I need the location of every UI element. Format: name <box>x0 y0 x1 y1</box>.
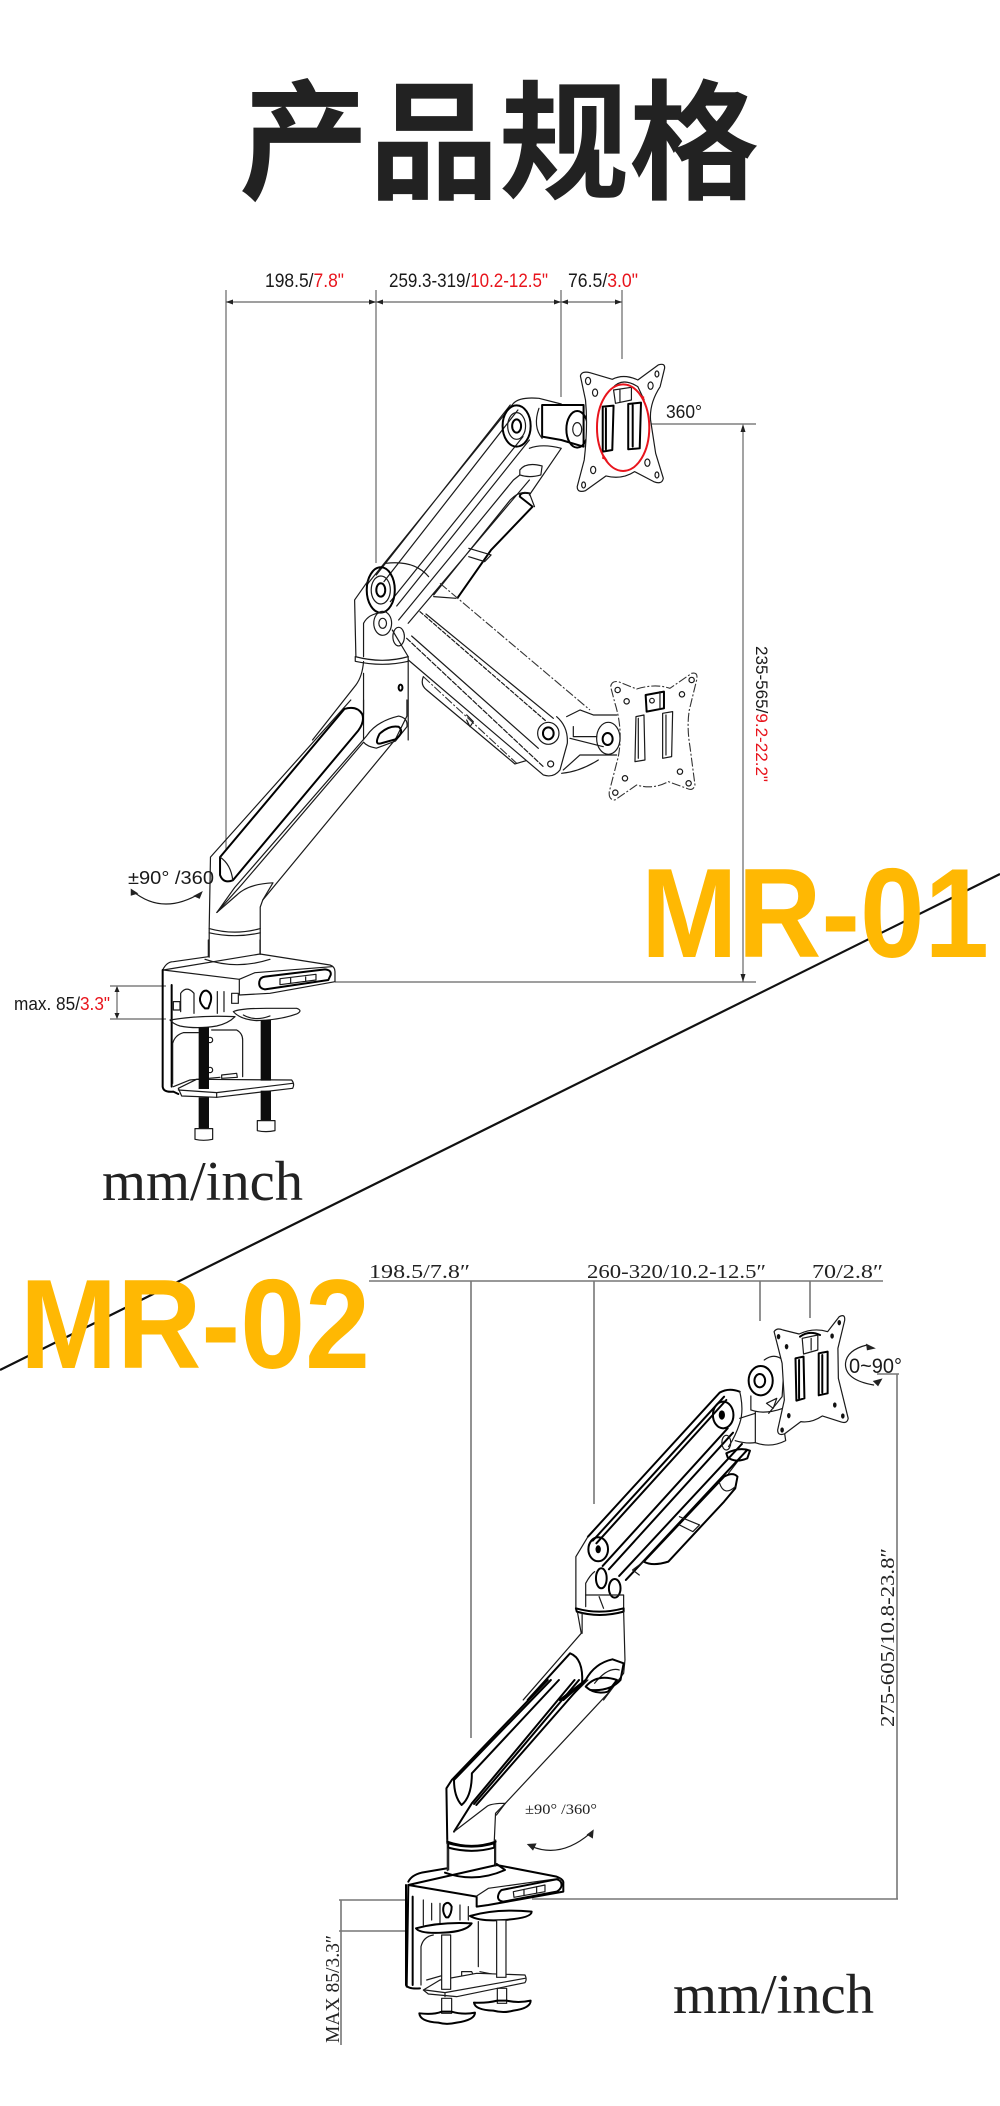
panel: MR-02 dimension lines <box>339 1281 899 2045</box>
lower arm <box>446 1678 617 1870</box>
tilt label: 0~90° <box>849 1355 902 1378</box>
monitor arm drawing MR-01 <box>163 364 697 1140</box>
dimension label 76.5: 76.5/3.0" <box>568 271 638 292</box>
dimension label 198.5/7.8: 198.5/7.8" <box>265 271 344 292</box>
dimension label 70: 70/2.8″ <box>812 1261 883 1283</box>
swivel label: ±90° /360 <box>128 868 214 888</box>
clamp dimension label: MAX 85/3.3″ <box>322 1935 344 2043</box>
rotation label 360: 360° <box>666 402 702 422</box>
dimension label 259.3-319: 259.3-319/10.2-12.5" <box>389 271 548 292</box>
tilt arrow <box>845 1344 883 1386</box>
title: 产品规格 <box>239 71 759 217</box>
panel: MR-01 dimension lines <box>110 290 756 1019</box>
monitor plate and tilt joint <box>764 1356 784 1413</box>
upper arm <box>523 1316 848 1700</box>
clamp base <box>406 1840 563 2024</box>
ghost arm lowered (dashed) <box>407 583 697 800</box>
unit label MR-01: mm/inch <box>102 1151 303 1213</box>
swivel label: ±90° /360° <box>525 1802 597 1818</box>
dimension label 198.5: 198.5/7.8″ <box>369 1261 470 1283</box>
height dimension label: 275-605/10.8-23.8″ <box>877 1548 899 1727</box>
lower arm and stem <box>209 700 407 957</box>
swivel arrow <box>527 1829 594 1851</box>
MR-02 model label: MR-02 <box>20 1253 370 1395</box>
clamp base <box>163 940 335 1140</box>
monitor plate upper <box>577 364 665 491</box>
clamp dimension label: max. 85/3.3" <box>14 994 110 1014</box>
swivel arrow <box>131 889 203 904</box>
diagonal divider line <box>0 874 1000 1370</box>
dimension label 260-320: 260-320/10.2-12.5″ <box>587 1261 766 1283</box>
height dimension label: 235-565/ 9.2-22.2" <box>752 646 771 782</box>
monitor arm drawing MR-02 <box>406 1316 848 2024</box>
unit label MR-02: mm/inch <box>673 1964 874 2026</box>
upper arm extended <box>313 398 588 740</box>
